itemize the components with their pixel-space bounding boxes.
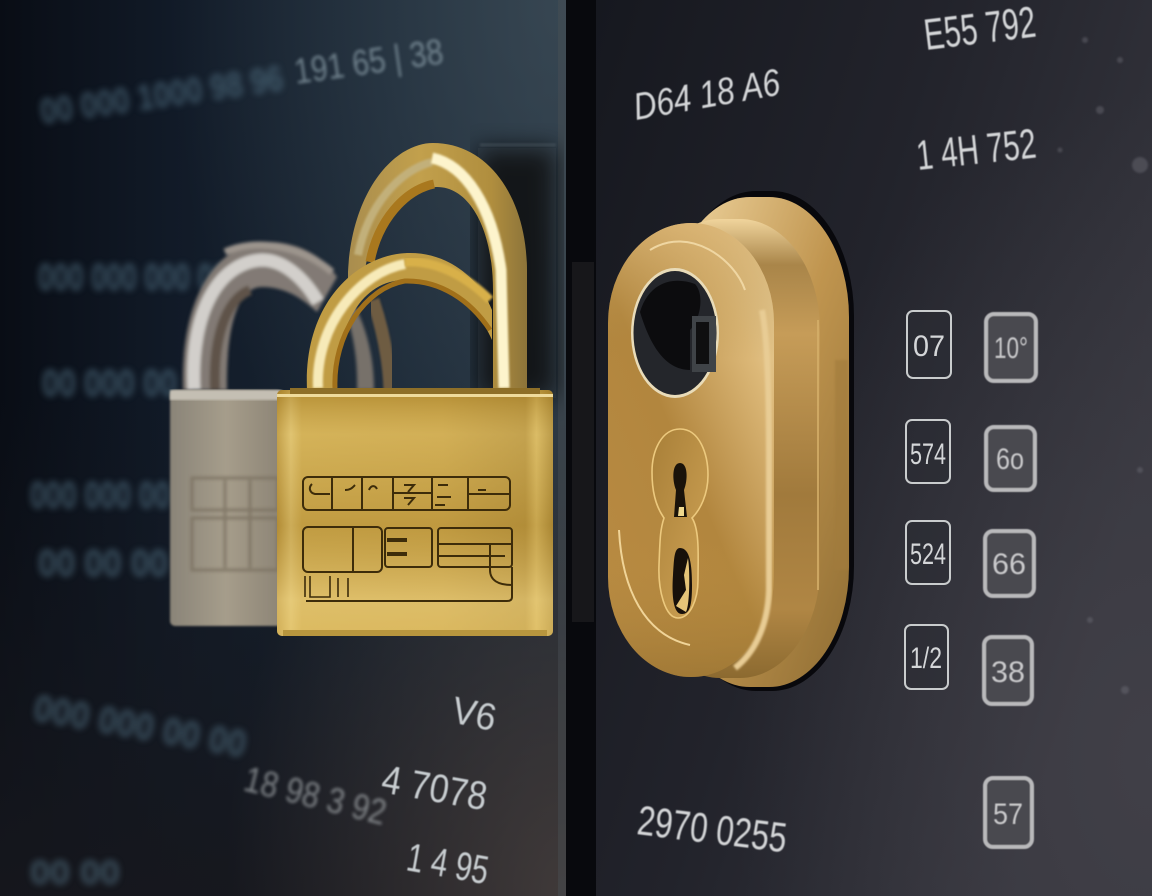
blurred number rows on left panel: 000 000 00 <box>30 475 170 517</box>
sharp numbers lower left panel <box>378 690 500 893</box>
back shackle <box>348 143 527 390</box>
blurred number rows on left panel: 000 000 000 00 <box>38 257 228 299</box>
numbers on right panel: D64 18 A6 <box>630 62 784 129</box>
numbers on right panel: 1 4H 752 <box>914 120 1038 179</box>
number buttons, left column labels: 07 <box>913 330 945 363</box>
number buttons, right column labels: 6o <box>996 443 1024 476</box>
blurred number rows on left panel: 00 00 <box>30 854 120 892</box>
front shackle <box>307 253 492 390</box>
engraving <box>303 477 512 601</box>
mid-focus numbers on lower left panel: 18 98 3 92 <box>240 758 391 833</box>
lower key slot <box>673 548 692 614</box>
number buttons, left column labels <box>910 330 946 675</box>
cylinder opening <box>631 268 719 398</box>
number buttons, right column labels: 57 <box>993 798 1023 831</box>
background: centre gap between panels <box>558 0 596 896</box>
sharp numbers lower left panel: 4 7078 <box>378 758 490 819</box>
blurred number rows on left panel: 00 000 1000 98 96 <box>37 57 286 132</box>
blurred number rows on left panel: 00 000 00 <box>42 363 177 405</box>
number buttons, right column labels: 10° <box>994 332 1028 365</box>
numbers on right panel: 2970 0255 <box>635 796 790 861</box>
sharp numbers lower left panel: V6 <box>448 690 500 740</box>
gold padlock <box>277 143 553 636</box>
silver padlock <box>170 242 374 626</box>
number buttons, right column <box>984 314 1036 847</box>
keyway escutcheon <box>652 429 708 618</box>
blurred number rows on left panel <box>30 57 286 892</box>
side cylinder <box>640 219 820 678</box>
face rim highlight <box>735 310 769 668</box>
blurred number rows on left panel: 000 000 00 00 <box>30 688 249 766</box>
body <box>277 390 553 636</box>
number buttons, right column labels: 66 <box>992 548 1026 581</box>
number buttons, left column labels: 524 <box>910 538 946 571</box>
semi-sharp numbers, top row of left panel: 191 65 | 38 <box>291 30 446 92</box>
front face <box>608 223 774 677</box>
blurred number rows on left panel: 00 00 00 <box>38 543 168 585</box>
door lock shadow ring <box>674 191 854 691</box>
number buttons, right column labels <box>991 332 1028 831</box>
numbers on right panel <box>630 0 1038 861</box>
outer plate <box>670 197 849 687</box>
background: left dark panel <box>0 0 566 896</box>
number buttons, right column labels: 38 <box>991 656 1025 689</box>
number buttons, left column labels: 1/2 <box>910 642 942 675</box>
background: right dark panel <box>596 0 1152 896</box>
number buttons, left column labels: 574 <box>910 438 946 471</box>
gold door lock <box>608 197 849 687</box>
shadow behind padlocks <box>478 143 556 398</box>
upper key slot <box>673 463 687 517</box>
number buttons, left column <box>905 311 951 689</box>
